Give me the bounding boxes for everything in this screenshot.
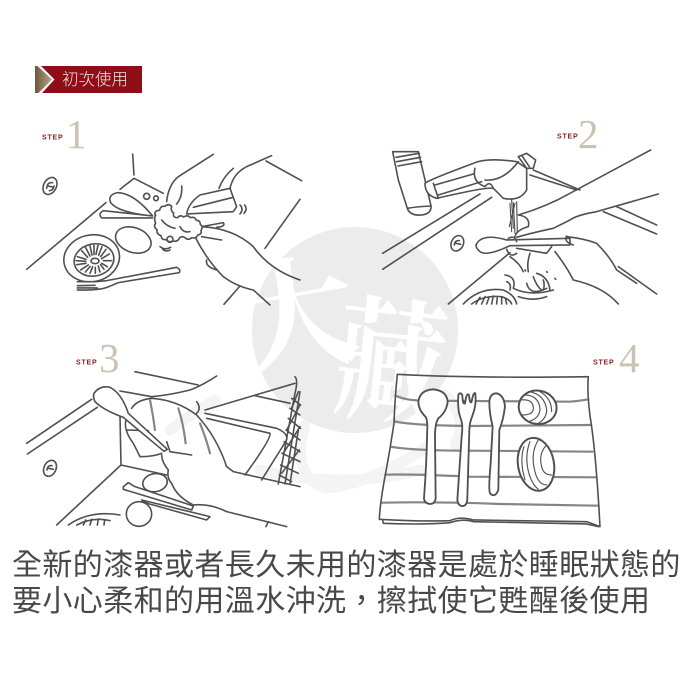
hands <box>507 150 658 304</box>
step 4 label: STEP <box>593 360 614 366</box>
step 4 illustration: utensils resting on a striped cloth <box>379 374 600 527</box>
step 2 label: 2 <box>578 111 598 157</box>
step 4 label: 4 <box>619 335 640 381</box>
cloth with stripes <box>125 376 227 467</box>
water stream <box>509 200 517 233</box>
icon: sink hole <box>449 234 466 253</box>
icon: soap dish holes <box>144 193 158 201</box>
icon: drain <box>59 230 124 287</box>
icon: drain <box>463 289 517 304</box>
step 3 illustration: wiping dry with a cloth <box>27 372 301 527</box>
water splash <box>505 253 556 299</box>
icon: fork <box>457 393 476 506</box>
dish rack <box>205 377 301 487</box>
step 4 label <box>593 335 640 381</box>
icon: fork <box>77 267 180 290</box>
icon: bowl <box>112 222 155 258</box>
watermark: brand seal: 藏 <box>327 286 454 446</box>
step 2 label <box>557 111 598 157</box>
icon: butter knife <box>489 393 505 495</box>
step 2 illustration: rinsing under warm water <box>383 150 658 304</box>
step 1 label: 1 <box>66 111 86 157</box>
striped cloth <box>379 374 600 527</box>
step 1 label: STEP <box>42 134 63 142</box>
icon: spoon being wiped <box>94 387 167 451</box>
step 3 label: 3 <box>99 335 120 381</box>
icon: faucet <box>393 152 536 215</box>
icon: round bowl <box>516 388 559 427</box>
hand <box>162 442 287 527</box>
step 1 illustration: washing utensils with a sponge <box>27 154 302 305</box>
heading banner: first use <box>35 66 142 93</box>
icon: spoon <box>418 389 448 504</box>
caption text: 全新的漆器或者長久未用的漆器是處於睡眠狀態的 <box>12 549 681 582</box>
caption text: 要小心柔和的用溫水沖洗，擦拭使它甦醒後使用 <box>12 585 650 618</box>
icon: lacquer spoon <box>100 193 153 218</box>
hands and foam <box>155 154 300 305</box>
icon: sponge <box>187 188 237 214</box>
icon: sink hole <box>41 458 59 478</box>
icon: bowls and utensils <box>68 472 210 526</box>
icon: oval bowl <box>514 435 558 494</box>
icon: spoon held in hand <box>476 237 570 253</box>
watermark: brand seal: 大 <box>221 242 368 400</box>
step 3 label: STEP <box>76 360 97 366</box>
heading banner: first use: 初次使用 <box>62 70 128 89</box>
watermark: brand seal <box>170 227 461 488</box>
step 1 label <box>42 111 86 157</box>
step 3 label <box>76 335 120 381</box>
step 2 label: STEP <box>557 134 578 140</box>
caption text <box>12 549 681 618</box>
icon: sink hole <box>40 175 60 197</box>
